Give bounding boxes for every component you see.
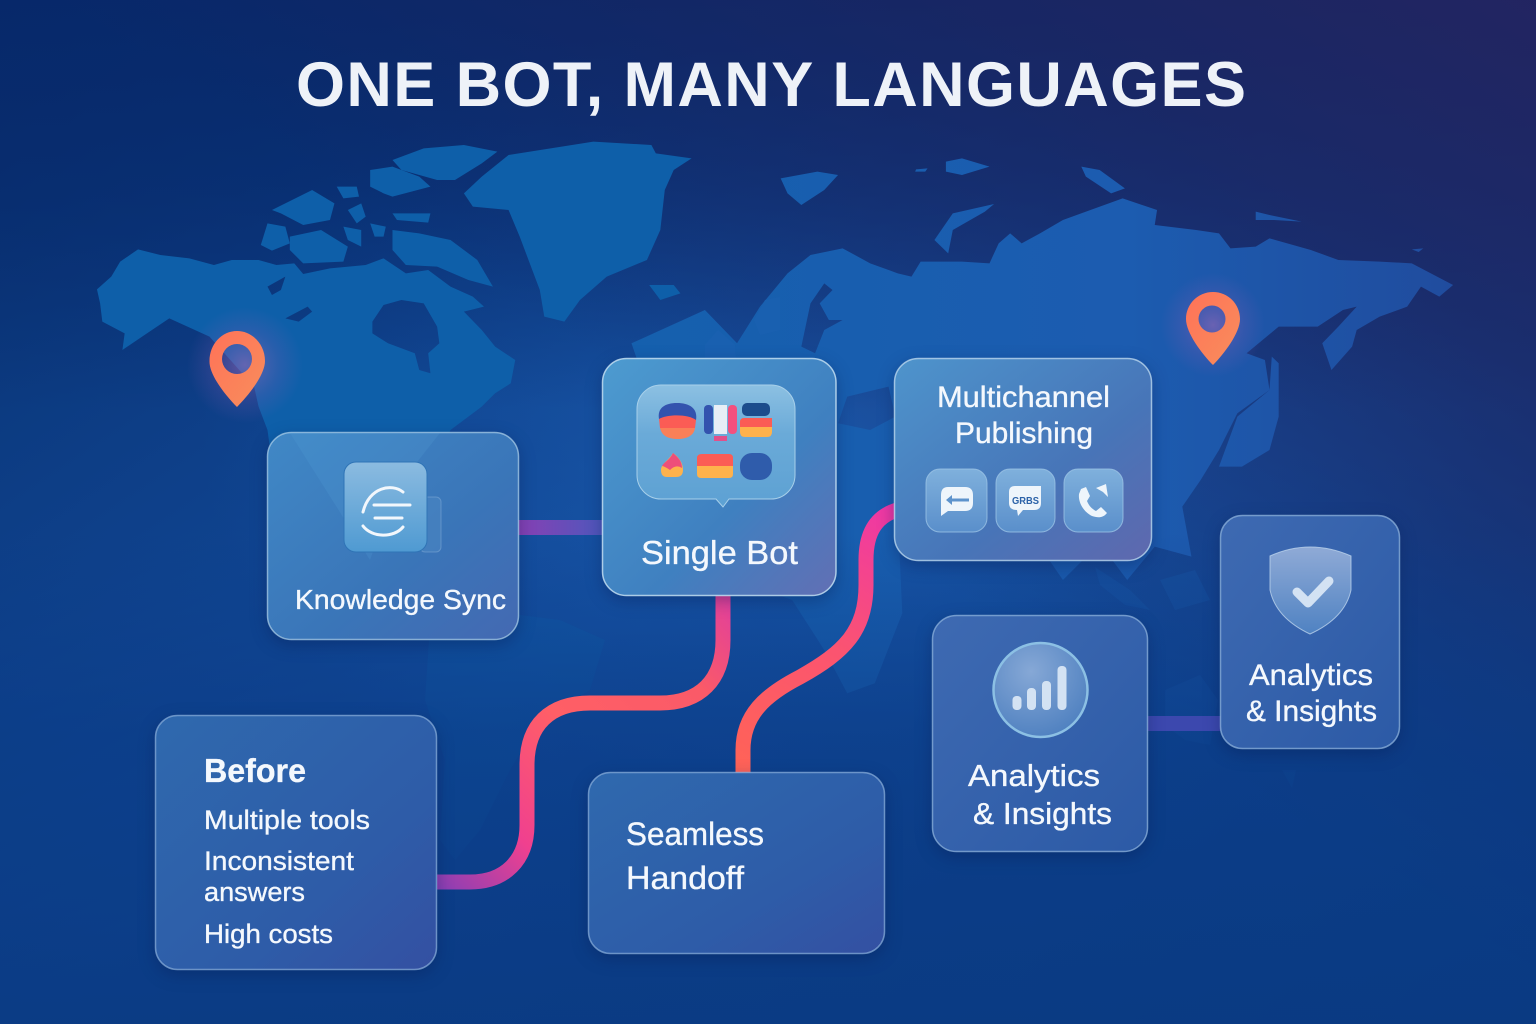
list: before problems: Inconsistent (204, 846, 355, 876)
label: analytics and insights: & Insights (973, 796, 1112, 831)
icon: bot speech bubble with flags (637, 385, 795, 507)
heading: multichannel publishing: Multichannel (937, 381, 1110, 414)
icon: business messaging channel: GRBS (1012, 496, 1039, 507)
south america (425, 610, 605, 860)
panel: analytics and insights, shield (1220, 516, 1400, 748)
title: ONE BOT, MANY LANGUAGES (296, 50, 1246, 120)
label: analytics and insights: & Insights (1246, 695, 1377, 728)
label: single bot: Single Bot (641, 534, 798, 571)
panel: before (156, 716, 436, 970)
panel: single bot (602, 358, 836, 596)
list: before problems: High costs (204, 919, 333, 949)
north america and greenland (97, 142, 692, 630)
icon: knowledge sync (344, 462, 441, 552)
heading: multichannel publishing: Publishing (955, 417, 1093, 450)
label: analytics and insights: Analytics (968, 758, 1100, 793)
panel: knowledge sync (268, 432, 518, 640)
connector: analytics to analytics (1146, 716, 1224, 731)
connector: knowledge sync to single bot (515, 520, 605, 535)
connector: before to single bot (437, 594, 723, 882)
icon: chat channel (926, 469, 987, 532)
icon: bar chart circle (994, 643, 1088, 737)
icon: phone channel (1064, 469, 1123, 532)
label: analytics and insights: Analytics (1249, 659, 1373, 692)
connector: seamless handoff to multichannel publishing (743, 510, 897, 774)
islands and australia (1095, 567, 1296, 788)
label: seamless handoff: Handoff (626, 860, 744, 896)
label: knowledge sync: Knowledge Sync (295, 584, 506, 615)
panel: multichannel publishing (894, 358, 1152, 560)
icon: shield with check (1270, 547, 1351, 634)
panel: seamless handoff (588, 772, 884, 954)
heading: before: Before (204, 752, 306, 789)
pin: asia (1161, 273, 1265, 377)
icon: business messaging channel (996, 469, 1055, 532)
pin: americas (187, 307, 303, 423)
list: before problems: Multiple tools (204, 805, 370, 835)
list: before problems: answers (204, 877, 305, 907)
eurasia (631, 158, 1453, 693)
world map (97, 142, 1453, 860)
panel: analytics and insights, chart (932, 616, 1148, 852)
label: seamless handoff: Seamless (626, 816, 764, 852)
